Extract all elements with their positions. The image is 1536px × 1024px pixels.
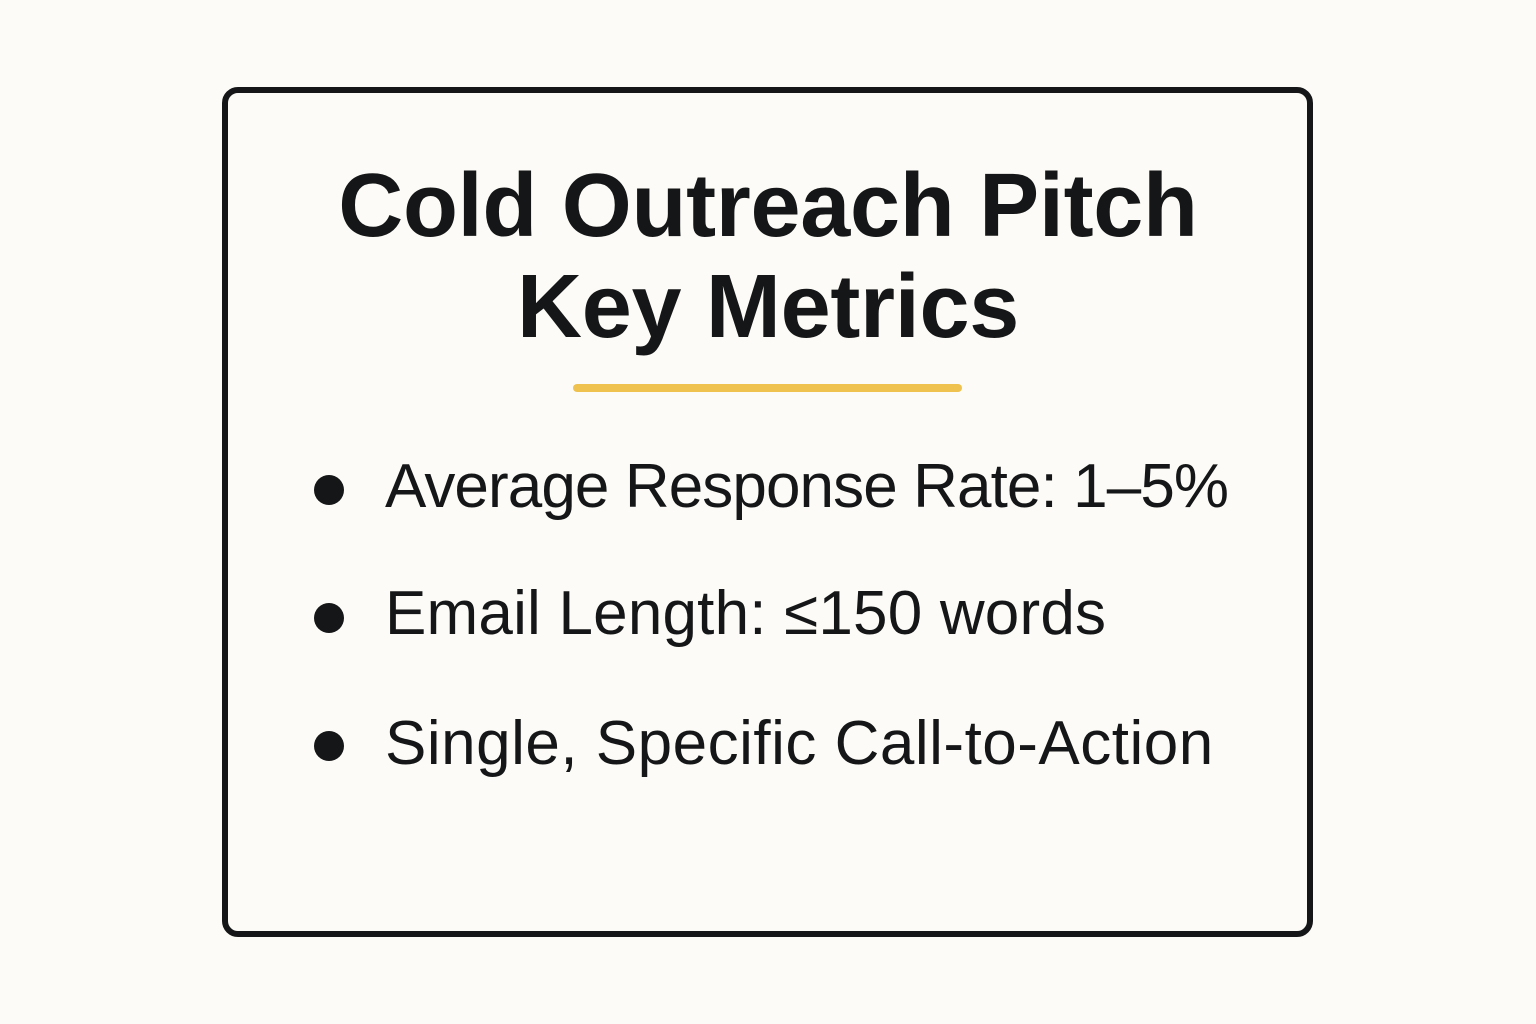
bullet: email length: Email Length: ≤150 words — [385, 579, 1106, 648]
panel: metrics card — [222, 87, 1313, 937]
bullet: response rate: Average Response Rate: 1–5% — [385, 452, 1228, 521]
title — [338, 156, 1198, 357]
title: Cold Outreach Pitch — [338, 156, 1198, 256]
title: Key Metrics — [517, 257, 1019, 357]
accent underline — [573, 384, 962, 392]
bullet: call to action: Single, Specific Call-to-Action — [385, 709, 1214, 778]
